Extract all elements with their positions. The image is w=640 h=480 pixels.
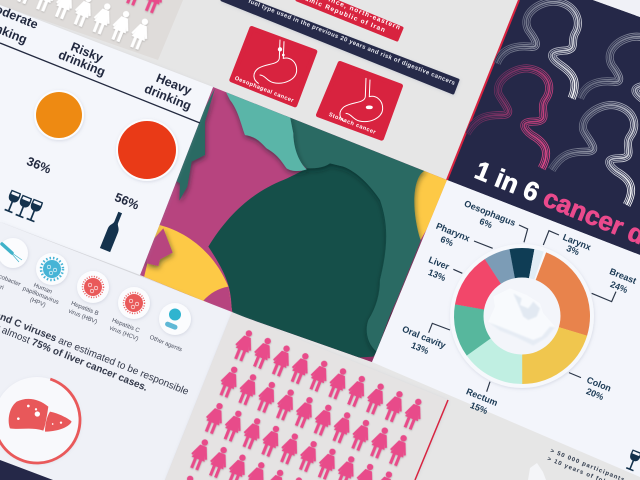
card: oesophageal cancer: Oesophageal cancer: [234, 76, 295, 104]
donut labels: 24%: [609, 279, 629, 295]
donut labels: 13%: [410, 340, 430, 356]
agent labels: Human: [32, 283, 53, 295]
icon: stomach with oesophageal tumour: [254, 40, 297, 83]
donut labels: 6%: [439, 234, 455, 248]
icon: Canada map: [488, 288, 555, 346]
percentages: [25, 154, 141, 213]
illustration: papercut head silhouette: [140, 87, 447, 362]
magenta profile on yellow: [147, 228, 173, 266]
agent labels: papillomavirus: [22, 286, 59, 306]
icon: bottle: [100, 210, 125, 252]
icon: hepatitis B virus: [77, 271, 109, 303]
teal hair mass: [283, 110, 427, 352]
donut labels: 6%: [478, 216, 494, 230]
panel: infectious agents: [0, 222, 232, 480]
card: stomach cancer: Stomach cancer: [328, 112, 377, 136]
circle: heavy 56%: [116, 119, 178, 181]
leader lines: [429, 225, 616, 392]
percentages: 56%: [113, 190, 141, 213]
icon: hepatitis C virus: [118, 287, 150, 319]
panel: alcohol drinking: [0, 0, 213, 275]
dark green head: [208, 157, 394, 358]
donut labels: 15%: [469, 400, 489, 416]
top right corner panel: [593, 0, 640, 17]
icon: white silhouette 3: [552, 105, 634, 205]
donut labels: 20%: [585, 386, 605, 402]
icon: wine glass: [626, 450, 640, 471]
donut labels: Oral cavity: [401, 324, 447, 350]
magenta shape on yellow: [203, 287, 233, 314]
agent labels: virus (HCV): [108, 325, 139, 343]
panel: women pictogram top: [0, 0, 183, 60]
donut labels: Larynx: [561, 232, 593, 252]
icon: white silhouette 1: [497, 2, 578, 98]
donut labels: Liver: [427, 254, 451, 272]
navy band: fuel type: fuel type used in the previous 20 years and risk of digestive cancers: [247, 0, 456, 87]
icon: liver in progress ring: [0, 366, 91, 474]
donut labels: [401, 198, 638, 416]
yellow patch right: [414, 169, 447, 240]
agent labels: (HPV): [29, 297, 46, 309]
agent labels: virus (HBV): [67, 308, 98, 326]
panel: women pictogram lower: [165, 312, 448, 480]
column headings: Risky: [69, 40, 105, 65]
icon: pink silhouette: [467, 68, 549, 168]
yellow circle: [143, 224, 233, 315]
percentages: 36%: [25, 154, 53, 177]
icon: other agents: [159, 303, 191, 335]
panel: donut chart of cancer sites: [372, 180, 640, 477]
donut labels: Oesophagus: [463, 198, 517, 228]
dark teal hair strand: [170, 88, 215, 201]
icon: stomach with tumour: [340, 78, 383, 122]
panel: 1 in 6 dark: [446, 0, 640, 255]
agent labels: [0, 270, 183, 353]
icon: three wine glasses: [4, 190, 43, 222]
panel: study participants: [528, 448, 640, 480]
icon: human papillomavirus: [36, 253, 68, 285]
donut chart: [448, 242, 596, 390]
icon: white silhouette 2: [576, 32, 640, 102]
column headings: [0, 0, 194, 113]
column headings: drinking: [142, 82, 193, 113]
donut labels: Rectum: [465, 386, 499, 408]
donut labels: Breast: [608, 266, 638, 286]
column headings: Heavy: [154, 71, 194, 98]
circle: risky 36%: [34, 90, 84, 140]
donut labels: 13%: [427, 267, 447, 283]
dark corner panel: [0, 460, 53, 480]
divider: [0, 43, 200, 123]
donut labels: Pharynx: [435, 221, 471, 243]
icon: Helicobacter pylori: [0, 238, 28, 268]
card: oesophageal cancer: [232, 28, 315, 105]
light teal profile: [225, 90, 307, 171]
agent labels: Hepatitis B: [70, 301, 99, 317]
donut labels: Colon: [585, 375, 613, 394]
column headings: drinking: [56, 48, 107, 79]
agent labels: Other agents: [148, 335, 183, 353]
agent labels: Hepatitis C: [111, 318, 141, 335]
card: stomach cancer: [318, 63, 401, 138]
donut labels: 3%: [565, 243, 581, 257]
